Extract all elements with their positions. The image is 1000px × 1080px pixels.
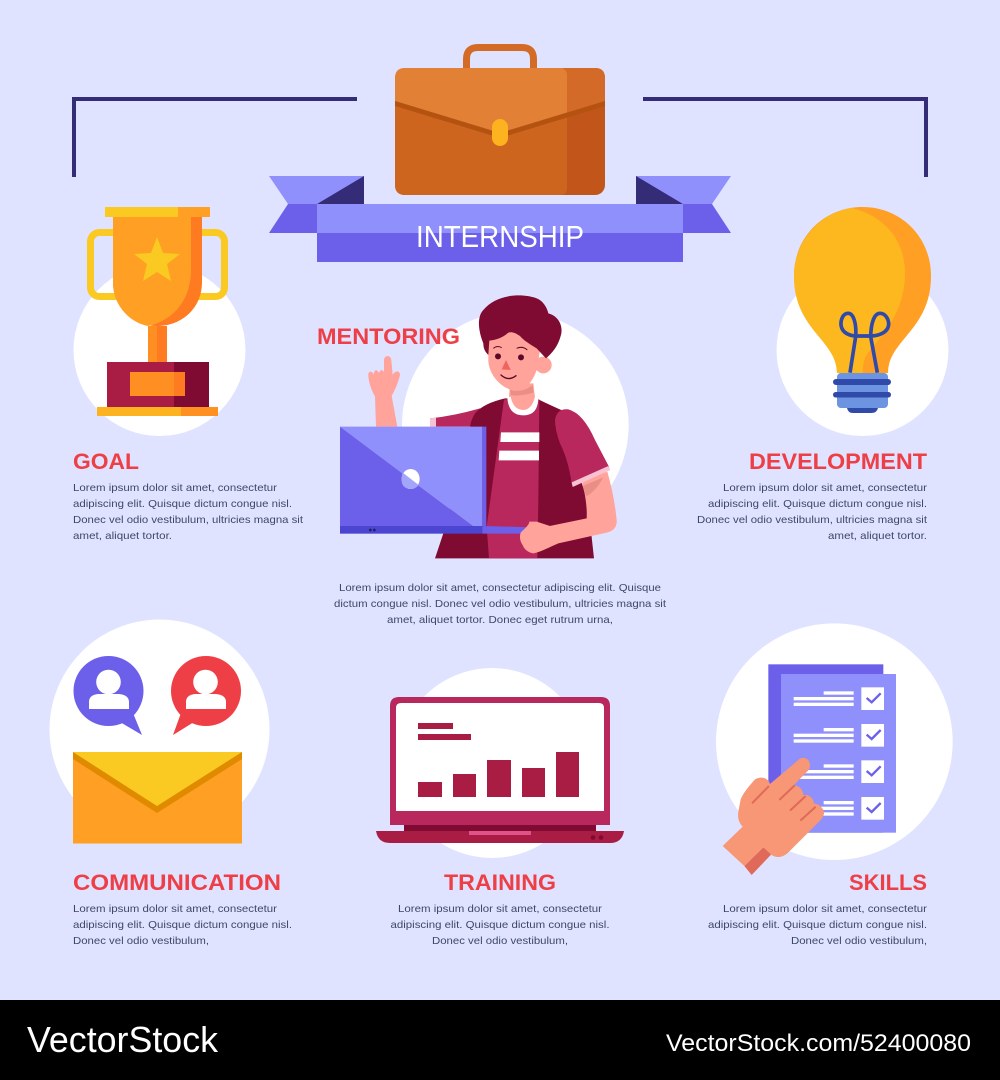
text: development: Donec vel odio vestibulum, ultricies magna sit xyxy=(697,514,927,526)
icon: light bulb xyxy=(776,207,948,436)
text: development: Lorem ipsum dolor sit amet, consectetur xyxy=(723,482,928,494)
icon: communication xyxy=(50,620,270,844)
icon: blue speech bubble xyxy=(74,656,144,735)
text: goal: adipiscing elit. Quisque dictum congue nisl. xyxy=(73,498,292,510)
text: communication xyxy=(73,903,292,947)
text: development: adipiscing elit. Quisque dictum congue nisl. xyxy=(708,498,927,510)
icon: laptop with bar chart xyxy=(376,668,624,858)
text: goal: Lorem ipsum dolor sit amet, consectetur xyxy=(73,482,278,494)
text: skills xyxy=(708,903,928,947)
heading: skills: SKILLS xyxy=(849,870,927,895)
heading: training: TRAINING xyxy=(444,870,556,895)
heading: mentoring: MENTORING xyxy=(317,324,460,349)
text: training: adipiscing elit. Quisque dictum congue nisl. xyxy=(390,919,610,931)
heading: goal: GOAL xyxy=(73,449,139,474)
icon: checklist with hand xyxy=(716,623,953,875)
text: skills: Donec vel odio vestibulum, xyxy=(791,935,927,947)
bar chart xyxy=(418,723,579,797)
text: goal xyxy=(73,482,303,542)
icon: red speech bubble xyxy=(171,656,241,735)
text: training: Donec vel odio vestibulum, xyxy=(432,935,568,947)
footer band: VectorStock xyxy=(27,1019,219,1060)
text: training xyxy=(390,903,610,947)
text: mentoring: Lorem ipsum dolor sit amet, consectetur adipiscing elit. Quisque xyxy=(339,582,661,594)
right bracket xyxy=(643,99,926,177)
icon: briefcase xyxy=(395,48,605,195)
text: skills: Lorem ipsum dolor sit amet, consectetur xyxy=(723,903,928,915)
footer band xyxy=(0,1000,1000,1080)
text: goal: Donec vel odio vestibulum, ultricies magna sit xyxy=(73,514,303,526)
text: communication: adipiscing elit. Quisque dictum congue nisl. xyxy=(73,919,292,931)
text: mentoring: amet, aliquet tortor. Donec eget rutrum urna, xyxy=(387,614,613,626)
text: communication: Lorem ipsum dolor sit amet, consectetur xyxy=(73,903,278,915)
heading: development: DEVELOPMENT xyxy=(749,449,928,474)
text: development: amet, aliquet tortor. xyxy=(828,530,927,542)
text: skills: adipiscing elit. Quisque dictum congue nisl. xyxy=(708,919,927,931)
text: training: Lorem ipsum dolor sit amet, consectetur xyxy=(398,903,603,915)
icon: trophy xyxy=(74,207,246,436)
footer band: VectorStock.com/52400080 xyxy=(666,1030,971,1057)
illustration: mentor with laptop xyxy=(340,295,629,558)
heading: communication: COMMUNICATION xyxy=(73,870,281,895)
text: communication: Donec vel odio vestibulum, xyxy=(73,935,209,947)
title: INTERNSHIP xyxy=(416,219,584,254)
text: development xyxy=(697,482,928,542)
text: goal: amet, aliquet tortor. xyxy=(73,530,172,542)
left bracket xyxy=(74,99,357,177)
text: mentoring: dictum congue nisl. Donec vel odio vestibulum, ultricies magna sit xyxy=(334,598,666,610)
text: mentoring xyxy=(334,582,666,626)
ribbon banner xyxy=(269,176,731,262)
